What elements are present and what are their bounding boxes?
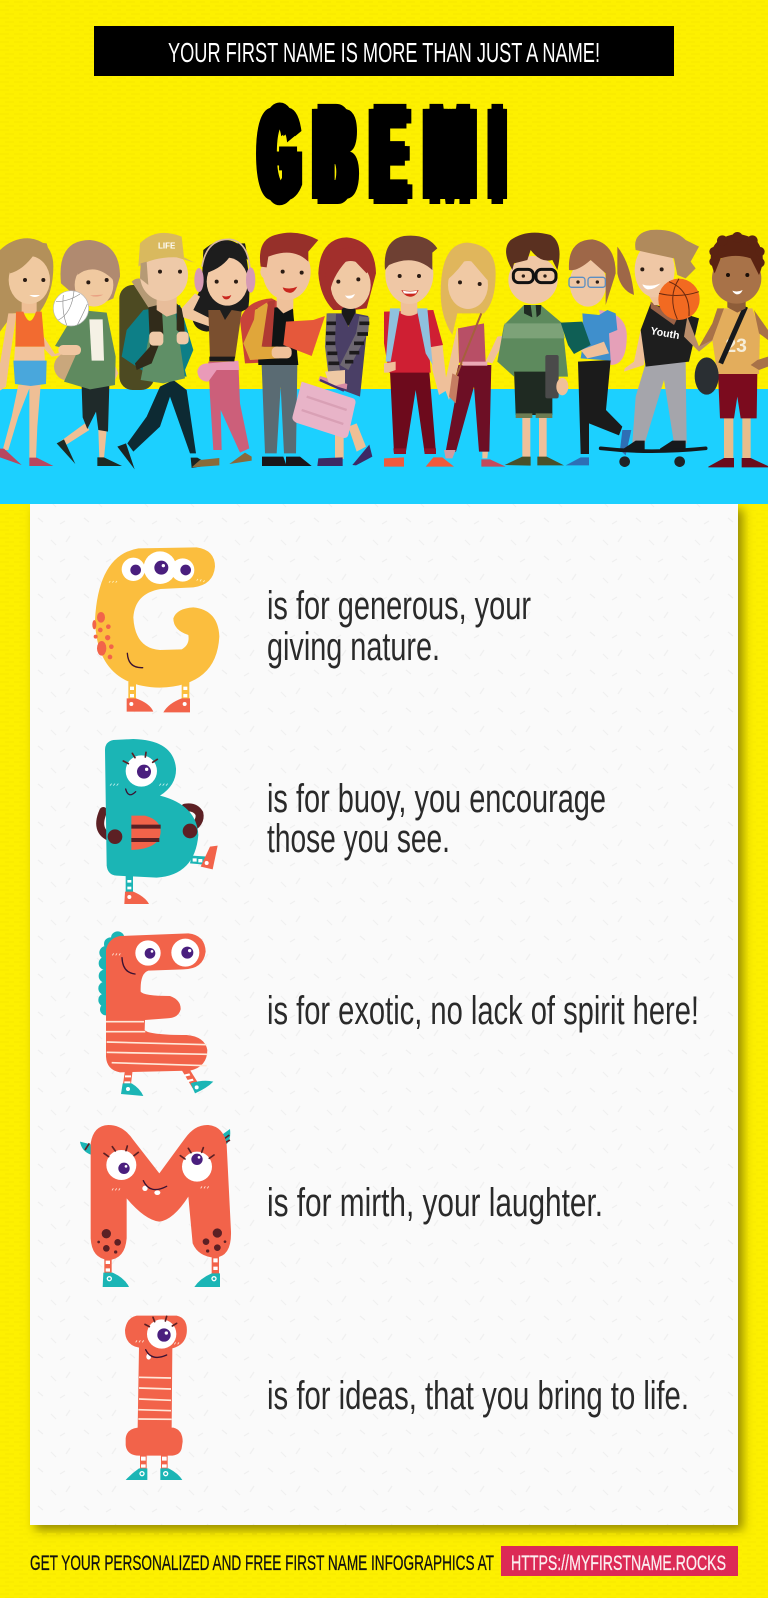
eyes	[122, 551, 194, 584]
letter body	[91, 1125, 231, 1260]
smile	[146, 1350, 167, 1360]
text: B line: is for buoy, you encourage	[267, 777, 606, 821]
eye	[123, 752, 157, 787]
spikes	[98, 931, 124, 1015]
title name: E	[372, 80, 408, 227]
person: hiker with hat and backpack: LIFE	[158, 242, 176, 251]
title name: B	[316, 80, 354, 227]
letter body	[106, 933, 207, 1072]
person: girl with headphones	[182, 239, 255, 467]
legs and shoes	[121, 1070, 213, 1096]
floor band	[0, 389, 768, 504]
text: B line	[267, 777, 606, 861]
legs and shoes	[127, 682, 190, 712]
legs and shoes	[103, 1255, 220, 1287]
text: G line: is for generous, your	[267, 584, 531, 628]
stripes	[138, 1377, 172, 1419]
monster letter B	[100, 739, 218, 904]
header banner	[94, 26, 674, 76]
horns	[80, 1129, 230, 1155]
person: boy with red hair and book	[240, 233, 325, 466]
person: hiker with hat and backpack	[117, 233, 210, 469]
monster letter E	[98, 931, 213, 1096]
person: girl with volleyball	[53, 240, 122, 466]
eyes	[104, 1146, 214, 1182]
monster letter G	[92, 547, 219, 712]
person: girl with red hair and pink bag	[292, 237, 376, 466]
text: B line: those you see.	[267, 817, 450, 861]
title name: I	[490, 80, 505, 227]
hands	[108, 824, 197, 844]
monster letter M	[80, 1125, 231, 1287]
group of people, left half	[0, 233, 376, 469]
smile	[127, 653, 143, 668]
stripes	[106, 1022, 207, 1066]
footer url badge	[501, 1546, 738, 1576]
footer call to action: GET YOUR PERSONALIZED AND FREE FIRST NAME INFOGRAPHICS AT	[30, 1552, 494, 1575]
title name: M	[428, 80, 472, 227]
eyes	[135, 939, 199, 967]
person: boy in red shirt	[384, 236, 454, 467]
person: boy with curly hair and bag: 23	[725, 336, 747, 357]
striped belly	[131, 816, 161, 850]
spots	[97, 1228, 226, 1254]
text: M line: is for mirth, your laughter.	[267, 1181, 603, 1225]
person: boy with glasses	[497, 233, 568, 466]
panel: white letter card	[30, 504, 738, 1525]
group of people, right half	[384, 230, 768, 467]
smile with teeth	[142, 1181, 167, 1195]
eye	[145, 1316, 177, 1349]
person: blonde girl	[441, 243, 507, 467]
title name: G	[261, 80, 298, 227]
text: G line	[267, 584, 531, 669]
person: girl with ponytail and tablet	[561, 239, 634, 465]
arms	[100, 807, 200, 839]
letter body	[95, 547, 219, 688]
monster letter I	[125, 1316, 187, 1480]
smile	[126, 789, 136, 795]
legs and shoes	[124, 846, 218, 904]
person: girl with orange top	[0, 238, 80, 466]
letter body	[125, 1316, 187, 1456]
letter body	[105, 739, 198, 878]
title name	[256, 80, 508, 227]
smile	[122, 958, 135, 974]
person: boy with curly hair and bag	[695, 232, 768, 467]
text: G line: giving nature.	[267, 625, 440, 669]
person: skater with basketball	[601, 230, 717, 467]
spots	[92, 612, 114, 659]
legs and shoes	[126, 1452, 182, 1480]
person: skater with basketball: Youth	[649, 325, 681, 342]
